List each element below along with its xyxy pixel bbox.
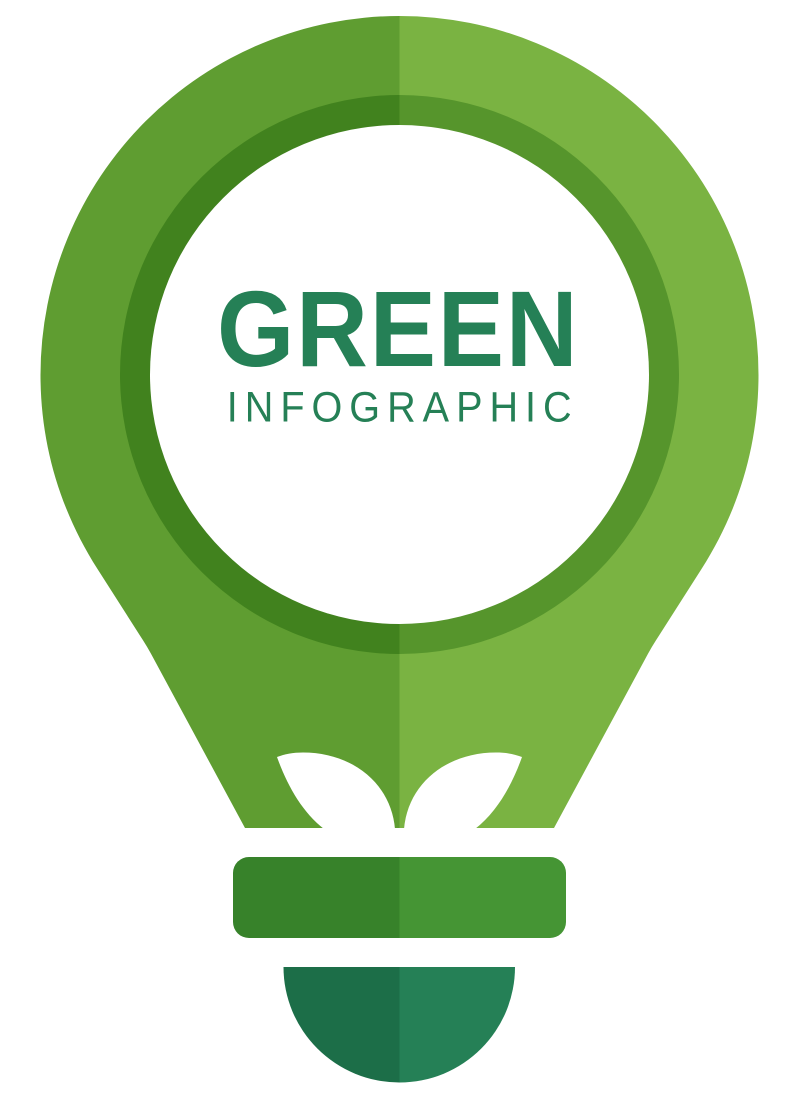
subtitle: INFOGRAPHIC xyxy=(227,383,579,431)
base left half xyxy=(284,967,400,1082)
bulb body xyxy=(40,16,758,828)
icon: sprout leaves xyxy=(277,752,522,829)
bulb collar xyxy=(233,857,566,938)
collar left half xyxy=(233,857,400,938)
collar right half xyxy=(400,857,566,938)
title: GREEN xyxy=(217,268,579,389)
left leaf xyxy=(277,752,395,829)
bulb right half xyxy=(400,16,758,828)
white center circle xyxy=(150,125,649,624)
ring right half xyxy=(400,95,679,654)
base right half xyxy=(400,967,515,1082)
bulb left half xyxy=(40,16,400,828)
ring left half xyxy=(120,95,400,654)
right leaf xyxy=(404,752,522,829)
ring around circle xyxy=(120,95,679,654)
bulb base xyxy=(284,967,515,1082)
